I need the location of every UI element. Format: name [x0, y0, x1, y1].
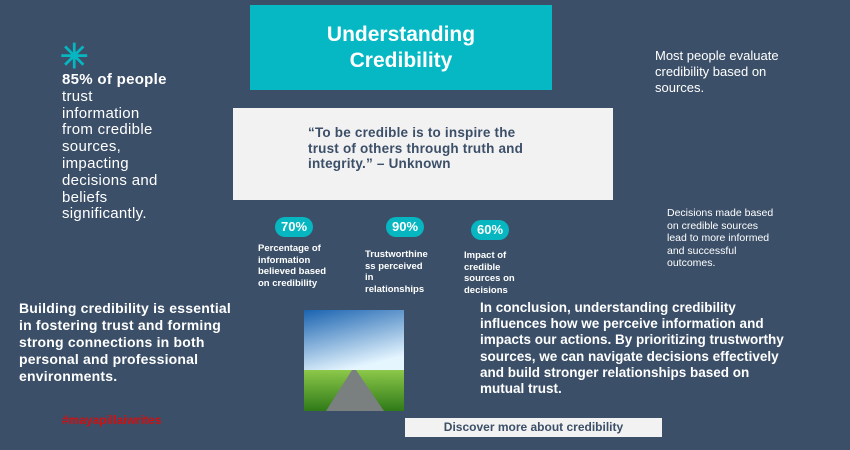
text: conclusion: and build stronger relationships based on [480, 365, 749, 380]
stat: 70%: information [258, 254, 310, 266]
title box [250, 5, 552, 90]
button: discover more [405, 418, 662, 437]
stat: 60%: decisions [464, 284, 508, 296]
text: sources note: Most people evaluate [655, 48, 779, 63]
stat: 60%: credible [464, 262, 500, 272]
text: building credibility: environments. [19, 368, 117, 384]
stat: 90%: 90% [392, 219, 418, 234]
icon: asterisk: ✳ [60, 38, 88, 76]
stat text: 85%: sources, [62, 138, 121, 155]
stat text: 85%: from credible [62, 121, 153, 138]
stat: 90% [365, 217, 428, 294]
text: building credibility: Building credibility is essential [19, 300, 231, 316]
stat: 70% [258, 217, 326, 288]
stat: 90%: ss perceived [365, 260, 423, 272]
stat: 90%: Trustworthine [365, 249, 428, 260]
stat text: 85%: information [62, 105, 140, 122]
text: conclusion: sources, we can navigate decisions effectively [480, 349, 779, 364]
stat: 90%: relationships [365, 284, 424, 294]
stat text: 85%: decisions and [62, 172, 158, 189]
text: conclusion: mutual trust. [480, 381, 562, 396]
text: decisions note: on credible sources [667, 220, 758, 232]
stat text: 85%: beliefs [62, 189, 107, 206]
stat: 60%: Impact of [464, 250, 506, 261]
quote box: trust of others through truth and [308, 140, 523, 156]
quote box: “To be credible is to inspire the [308, 125, 515, 140]
button: discover more: Discover more about credibility [444, 420, 623, 434]
text: sources note [655, 48, 779, 95]
stat text: 85%: significantly. [62, 205, 147, 222]
text: building credibility: in fostering trust and forming [19, 317, 221, 333]
title box: Credibility [350, 48, 452, 72]
text: conclusion [480, 300, 784, 396]
hashtag: #mayapillaiwrites [62, 413, 161, 427]
stat: 60% [464, 220, 515, 296]
text: sources note: credibility based on [655, 64, 766, 79]
quote box [233, 108, 613, 200]
text: decisions note: and successful [667, 244, 736, 256]
stat: 60%: 60% [477, 222, 503, 237]
text: decisions note [667, 207, 773, 269]
stat text: 85%: 85% of people [62, 71, 167, 88]
image: road [304, 310, 404, 411]
stat text: 85%: impacting [62, 155, 129, 172]
stat text: 85% [62, 71, 167, 222]
stat: 70%: Percentage of [258, 243, 321, 254]
quote box: integrity.” – Unknown [308, 156, 451, 171]
stat: 70%: believed based [258, 266, 326, 277]
stat: 90%: in [365, 272, 373, 283]
stat: 60%: sources on [464, 273, 515, 284]
text: building credibility: strong connections in both [19, 334, 205, 350]
text: sources note: sources. [655, 80, 704, 95]
text: decisions note: outcomes. [667, 257, 715, 269]
text: decisions note: Decisions made based [667, 207, 773, 219]
text: building credibility: personal and professional [19, 351, 198, 367]
text: conclusion: In conclusion, understanding credibility [480, 300, 736, 315]
text: conclusion: influences how we perceive information and [480, 316, 764, 331]
stat text: 85%: trust [62, 88, 93, 105]
stat: 70%: on credibility [258, 278, 317, 288]
text: building credibility [19, 300, 231, 384]
stat: 70%: 70% [281, 219, 307, 234]
title box: Understanding [327, 22, 475, 46]
text: decisions note: lead to more informed [667, 232, 769, 244]
text: conclusion: impacts our actions. By prioritizing trustworthy [480, 332, 784, 347]
